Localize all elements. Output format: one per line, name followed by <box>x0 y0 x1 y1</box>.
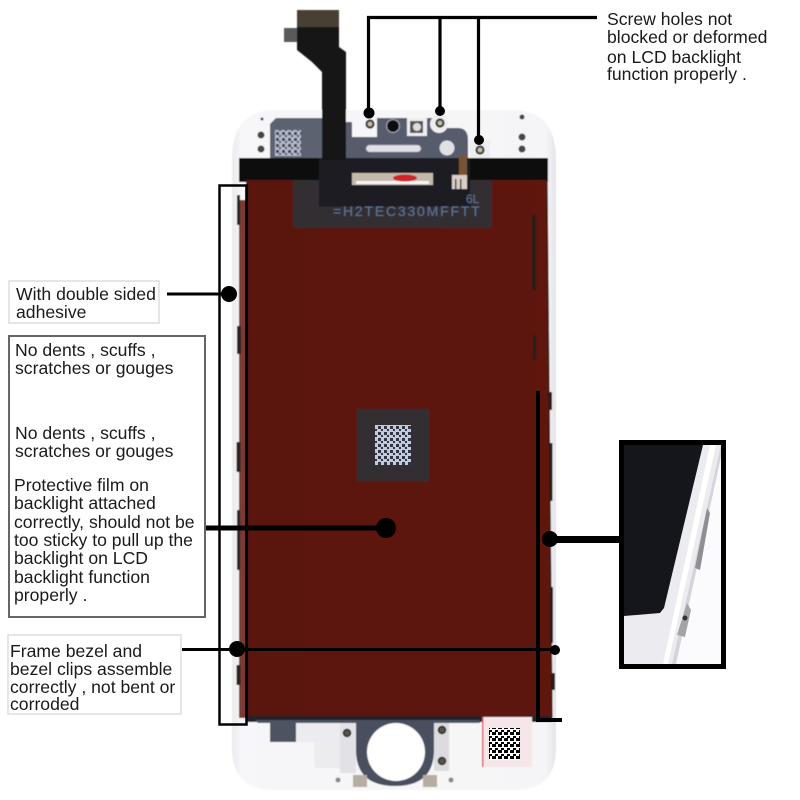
callout: screw holes text <box>607 9 767 84</box>
bottom small dots <box>336 778 340 782</box>
label: double sided adhesive: With double sided <box>16 284 156 304</box>
left panel edge line <box>246 185 248 720</box>
black top band <box>239 158 548 182</box>
white phone frame <box>232 110 556 790</box>
6L print: 6L <box>466 192 480 206</box>
camera hole <box>386 120 400 132</box>
label: double sided adhesive <box>9 281 159 323</box>
bottom gray bracket <box>255 720 480 742</box>
label: double sided adhesive: adhesive <box>16 302 86 322</box>
inset: lower white frame <box>624 445 722 664</box>
red mark on connector <box>393 174 417 182</box>
top left gray label <box>270 118 322 158</box>
sticker QR code <box>489 728 520 760</box>
flex top connector <box>297 10 339 27</box>
callout: screw holes text: on LCD backlight <box>607 47 741 67</box>
center QR code <box>375 425 411 465</box>
phone LCD assembly <box>232 10 556 790</box>
bottom lighter plate <box>340 723 356 773</box>
left side clips <box>236 195 241 685</box>
center QR pad <box>357 409 429 481</box>
top side holes <box>258 114 526 152</box>
inset: black screen <box>624 445 703 616</box>
inset: black border <box>622 442 724 666</box>
label: inspection notes box: too sticky to pull up the <box>14 530 193 550</box>
inset: frame highlight <box>663 445 716 664</box>
label: frame bezel: corroded <box>10 694 79 714</box>
label: inspection notes box: backlight on LCD <box>14 548 148 568</box>
leader: side detail <box>542 531 620 547</box>
red backlight panel <box>246 180 552 718</box>
leader: protective film <box>206 518 396 538</box>
tab print: =H2TEC330MFFTT <box>333 203 482 219</box>
dark top tab <box>293 180 492 228</box>
label: inspection notes box: scratches or gouges <box>15 441 174 461</box>
screw halos <box>430 115 490 158</box>
label: inspection notes box: correctly, should not be <box>14 512 195 532</box>
sensor window <box>407 118 427 136</box>
leader: adhesive <box>167 286 237 302</box>
callout: screw holes text: blocked or deformed <box>607 27 767 47</box>
screw holes <box>366 120 484 154</box>
front sensor circle <box>440 140 454 156</box>
bracket: left edge rectangle <box>220 186 246 724</box>
bottom screws <box>344 726 446 764</box>
leader: frame bezel <box>182 641 560 657</box>
right panel edge <box>547 180 552 718</box>
label: frame bezel: correctly , not bent or <box>10 677 175 697</box>
serial sticker <box>482 717 532 767</box>
callout: screw holes text: function properly . <box>607 64 747 84</box>
inset: frame shadow edge <box>672 445 722 664</box>
label: inspection notes box: No dents , scuffs , <box>15 340 156 360</box>
label: frame bezel: Frame bezel and <box>10 641 142 661</box>
home button hole <box>367 723 425 781</box>
label: inspection notes box: properly . <box>14 585 87 605</box>
top left label code <box>275 130 301 156</box>
inset: side detail photo <box>621 442 724 667</box>
bottom dark edge <box>246 716 552 722</box>
label: inspection notes box: backlight function <box>14 567 150 587</box>
dark flex on top <box>319 158 470 206</box>
lower left light panel <box>296 723 340 768</box>
left brown strip <box>239 200 246 718</box>
label: frame bezel <box>8 635 181 714</box>
small copper connector <box>459 155 467 175</box>
label: inspection notes box <box>9 336 205 617</box>
label: frame bezel: bezel clips assemble <box>10 659 172 679</box>
label: inspection notes box: Protective film on <box>14 475 149 495</box>
home button ring <box>356 720 434 786</box>
home bracket tabs <box>353 775 367 787</box>
callout: screw holes text: Screw holes not <box>607 9 732 29</box>
label: inspection notes box: No dents , scuffs , <box>15 423 156 443</box>
right side clips <box>532 215 555 690</box>
label: inspection notes box: backlight attached <box>14 493 156 513</box>
connector <box>352 173 433 185</box>
bracket: right edge line <box>538 391 562 720</box>
top metal plate <box>346 118 468 158</box>
inset: side clips <box>695 508 710 570</box>
flex small connector <box>284 28 297 42</box>
label: inspection notes box: scratches or gouges <box>15 358 174 378</box>
flex cable <box>297 27 346 160</box>
leader lines: screw holes <box>364 18 597 145</box>
speaker slot <box>366 145 421 152</box>
